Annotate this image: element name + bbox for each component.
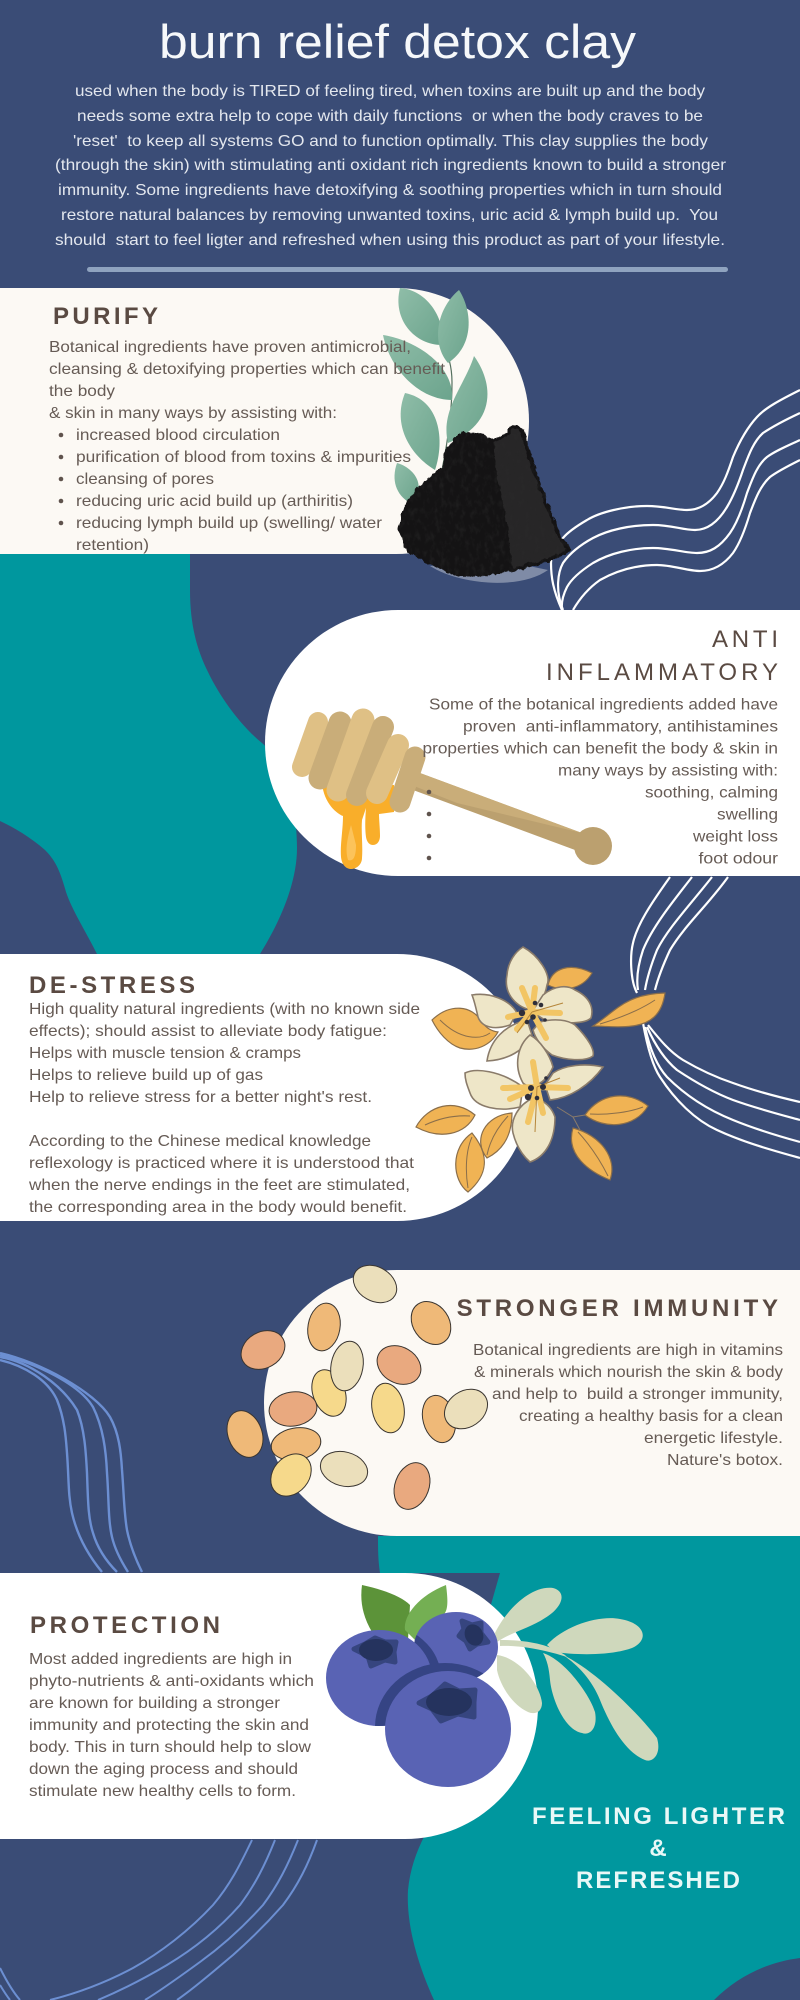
intro text: should start to feel ligter and refreshed when using this product as part of your lifestyle.	[55, 232, 725, 249]
panel: purify body text: retention)	[76, 537, 149, 554]
panel: purify	[0, 288, 529, 554]
intro text: needs some extra help to cope with daily functions or when the body craves to be	[77, 108, 703, 125]
text: de-stress body: According to the Chinese medical knowledge	[29, 1133, 371, 1150]
closing message: FEELING LIGHTER	[532, 1803, 785, 1830]
text: anti inflammatory body: many ways by assisting with:	[558, 762, 778, 780]
panel: purify body text: cleansing of pores	[76, 471, 214, 488]
text: anti inflammatory body: foot odour	[698, 850, 779, 868]
heading: anti inflammatory	[546, 626, 778, 686]
panel: protection	[0, 1573, 538, 1839]
closing message	[532, 1803, 785, 1894]
icon: seeds	[221, 1258, 495, 1514]
panel: purify body text: cleansing & detoxifying properties which can benefit	[49, 361, 446, 378]
text: anti inflammatory body: soothing, calming	[645, 784, 778, 802]
text: de-stress body	[28, 1001, 420, 1216]
text: anti inflammatory body: Some of the botanical ingredients added have	[429, 696, 778, 714]
panel: stronger immunity	[264, 1270, 800, 1536]
text: anti inflammatory body: proven anti-inflammatory, antihistamines	[463, 718, 778, 736]
title: burn relief detox clay	[159, 15, 637, 68]
text: de-stress body: effects); should assist to alleviate body fatigue:	[29, 1023, 387, 1040]
panel: purify body text: the body	[49, 383, 115, 400]
navy corner shape	[714, 1958, 800, 2000]
white wave lines: middle right	[631, 877, 800, 1158]
text: de-stress body: Helps with muscle tension & cramps	[29, 1045, 301, 1062]
text: stronger immunity body: Botanical ingredients are high in vitamins	[473, 1342, 783, 1359]
panel: purify body text: & skin in many ways by assisting with:	[49, 405, 337, 422]
intro text: used when the body is TIRED of feeling tired, when toxins are built up and the body	[75, 83, 705, 100]
text: protection body: Most added ingredients are high in	[29, 1651, 292, 1668]
icon: leafy sprig	[495, 1588, 658, 1761]
panel: purify body text: reducing lymph build up (swelling/ water	[76, 515, 383, 532]
intro text: restore natural balances by removing unwanted toxins, uric acid & lymph build up. You	[61, 207, 718, 224]
text: anti inflammatory body: weight loss	[692, 828, 778, 846]
icon: green leaves	[383, 288, 487, 503]
text: protection body: body. This in turn should help to slow	[29, 1739, 311, 1756]
text: stronger immunity body: creating a healthy basis for a clean	[519, 1408, 783, 1425]
closing message: &	[649, 1835, 667, 1862]
intro text	[55, 83, 727, 249]
text: protection body: immunity and protecting the skin and	[29, 1717, 309, 1734]
icon: flowers	[416, 947, 665, 1192]
icon: charcoal	[400, 427, 570, 583]
panel: purify body text	[49, 339, 446, 554]
white wave lines: top right	[551, 390, 800, 610]
intro text: 'reset' to keep all systems GO and to function optimally. This clay supplies the body	[73, 133, 708, 150]
text: protection body: down the aging process and should	[29, 1761, 298, 1778]
divider bar	[87, 267, 728, 272]
blue wave lines: bottom	[0, 1840, 317, 2000]
icon: blueberries	[317, 1585, 515, 1791]
text: anti inflammatory body	[422, 696, 779, 868]
heading: anti inflammatory: INFLAMMATORY	[546, 659, 778, 686]
panel: anti inflammatory	[265, 610, 800, 876]
text: de-stress body: when the nerve endings in the feet are stimulated,	[28, 1177, 410, 1194]
text: anti inflammatory body: properties which can benefit the body & skin in	[422, 740, 778, 758]
text: de-stress body: the corresponding area in the body would benefit.	[29, 1199, 407, 1216]
blue wave lines: left	[0, 1353, 142, 1572]
heading: anti inflammatory: ANTI	[712, 626, 778, 653]
panel: purify body text: reducing uric acid build up (arthiritis)	[76, 493, 353, 510]
text: stronger immunity body: and help to build a stronger immunity,	[492, 1386, 783, 1403]
text: protection body: are known for building a stronger	[29, 1695, 281, 1712]
closing message: REFRESHED	[576, 1867, 740, 1894]
text: de-stress body: Help to relieve stress for a better night's rest.	[29, 1089, 372, 1106]
text: stronger immunity body: energetic lifestyle.	[644, 1430, 783, 1447]
panel: de-stress	[0, 954, 530, 1221]
text: de-stress body: reflexology is practiced where it is understood that	[29, 1155, 415, 1172]
heading: protection: PROTECTION	[30, 1612, 220, 1639]
panel: purify heading: PURIFY	[53, 303, 158, 330]
text: stronger immunity body	[473, 1342, 783, 1469]
text: protection body: phyto-nutrients & anti-oxidants which	[29, 1673, 314, 1690]
intro text: (through the skin) with stimulating anti oxidant rich ingredients known to build a stronger	[55, 157, 727, 174]
heading: stronger immunity: STRONGER IMMUNITY	[457, 1295, 778, 1322]
panel: purify body text: Botanical ingredients have proven antimicrobial,	[49, 339, 411, 356]
intro text: immunity. Some ingredients have detoxifying & soothing properties which in turn should	[58, 182, 722, 199]
teal blob: bottom right	[378, 1536, 800, 2000]
text: protection body: stimulate new healthy cells to form.	[29, 1783, 296, 1800]
panel: purify body text: purification of blood from toxins & impurities	[76, 449, 411, 466]
heading: de-stress: DE-STRESS	[29, 972, 195, 999]
panel: purify body text: increased blood circulation	[76, 427, 280, 444]
text: de-stress body: Helps to relieve build up of gas	[29, 1067, 263, 1084]
icon: honey dipper	[302, 720, 612, 869]
teal blob: left	[0, 554, 297, 954]
text: stronger immunity body: & minerals which nourish the skin & body	[474, 1364, 783, 1381]
text: de-stress body: High quality natural ingredients (with no known side	[29, 1001, 420, 1018]
text: anti inflammatory body: swelling	[717, 806, 778, 824]
text: stronger immunity body: Nature's botox.	[667, 1452, 783, 1469]
text: protection body	[29, 1651, 314, 1800]
